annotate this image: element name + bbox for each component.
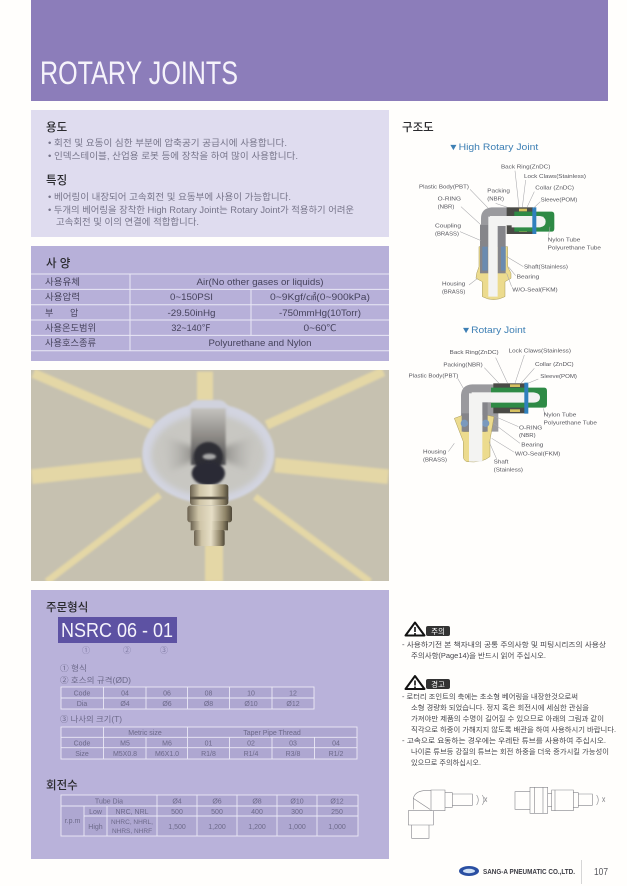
part labels: (Stainless) xyxy=(494,468,523,474)
warning text: - 로터리 조인트의 축에는 초소형 베어링을 내장한것으로써 xyxy=(402,692,578,701)
table: hose size codes: Ø8 xyxy=(204,701,213,708)
specification table: 사용압력 xyxy=(45,291,80,302)
warning text: - 고속으로 요동하는 경우에는 우레탄 튜브를 사용하여 주십시오. xyxy=(402,736,606,745)
heading: rotation speed: 회전수 xyxy=(46,777,78,793)
legend: type and hose size: ① 형식 xyxy=(60,664,87,673)
table: rotation speed by tube diameter: 400 xyxy=(251,809,263,816)
part labels: W/O-Seal(FKM) xyxy=(512,287,558,293)
specification table: 사용호스종류 xyxy=(45,338,96,348)
part labels xyxy=(409,349,597,474)
heading: specifications: 사 양 xyxy=(46,255,71,271)
table: hose size codes: Code xyxy=(74,690,90,698)
specification table: 0~150PSI xyxy=(170,292,213,302)
part labels: Sleeve(POM) xyxy=(541,197,577,203)
table: hose size codes: 10 xyxy=(247,690,255,698)
text block: usage: • 인덱스테이블, 산업용 로봇 등에 장착을 하여 많이 사용합니다. xyxy=(48,150,298,161)
part labels: Collar (ZnDC) xyxy=(535,362,574,368)
part labels: Housing xyxy=(442,282,465,288)
warning text: 직각으로 하중이 가해지지 않도록 배관을 하여 사용하시기 바랍니다. xyxy=(411,725,616,734)
part labels: Bearing xyxy=(517,275,539,281)
table: hose size codes xyxy=(61,687,314,709)
joint cross-section xyxy=(476,207,554,300)
table: rotation speed by tube diameter: 1,200 xyxy=(208,824,226,831)
warning text: 있으므로 주의하십시오. xyxy=(411,758,481,767)
table: hose size codes: Ø12 xyxy=(286,701,300,708)
table: rotation speed by tube diameter: High xyxy=(88,824,103,831)
part labels: Shaft xyxy=(494,460,509,466)
specification table: -29.50inHg xyxy=(168,308,216,318)
table: rotation speed by tube diameter: NRC, NRL xyxy=(115,809,149,816)
table: thread codes: Metric size xyxy=(128,730,162,737)
table: thread codes: Code xyxy=(74,740,90,748)
table: rotation speed by tube diameter: NHRC, NHRL, xyxy=(111,819,153,826)
part labels: Polyurethane Tube xyxy=(548,245,601,251)
specification table: 32~140℉ xyxy=(171,323,211,333)
panel: ordering code and rotation speed xyxy=(31,590,389,859)
table: thread codes: 01 xyxy=(205,740,212,748)
table: rotation speed by tube diameter: Low xyxy=(89,809,103,816)
table: thread codes: 02 xyxy=(247,740,255,748)
table: rotation speed by tube diameter: NHRS, NHRF xyxy=(112,828,152,835)
table: thread codes: R3/8 xyxy=(286,751,300,758)
table: rotation speed by tube diameter: Tube Dia xyxy=(95,798,123,806)
part labels: (BRASS) xyxy=(442,290,465,296)
table: rotation speed by tube diameter: Ø8 xyxy=(252,798,262,806)
specification table: -750mmHg(10Torr) xyxy=(279,308,361,318)
part labels: Packing xyxy=(487,189,510,195)
code position markers xyxy=(82,646,168,655)
text block: features xyxy=(48,191,354,227)
part labels: Bearing xyxy=(521,443,543,449)
diagram: high rotary joint xyxy=(419,142,601,300)
specification table: 사용유체 xyxy=(45,277,80,287)
table: hose size codes: 06 xyxy=(163,690,171,698)
caution note xyxy=(402,622,607,660)
part labels: Plastic Body(PBT) xyxy=(409,373,458,379)
warning label xyxy=(426,679,450,689)
icon: company logo xyxy=(459,866,479,876)
panel: usage and features xyxy=(31,110,389,237)
caution text: - 사용하기전 본 책자내의 공통 주의사항 및 피팅시리즈의 사용상 xyxy=(402,640,607,649)
table: thread codes: 04 xyxy=(332,740,340,748)
table: thread codes: R1/4 xyxy=(244,751,258,758)
part labels: Coupling xyxy=(435,224,461,230)
caution label: 주의 xyxy=(431,626,445,636)
leader lines xyxy=(448,355,545,459)
table: rotation speed by tube diameter: Ø6 xyxy=(212,798,222,806)
part labels: Polyurethane Tube xyxy=(544,420,597,426)
table: hose size codes: 04 xyxy=(121,690,129,698)
photo: spinning rotary joint with radiating tubes xyxy=(31,370,389,582)
warning text: 나이론 튜브등 강질의 튜브는 회전 하중을 더욱 증가시킬 가능성이 xyxy=(411,747,609,756)
table: rotation speed by tube diameter: r.p.m xyxy=(65,818,80,825)
table: rotation speed by tube diameter: 500 xyxy=(171,809,183,816)
part labels: Lock Claws(Stainless) xyxy=(524,174,586,180)
part labels: W/O-Seal(FKM) xyxy=(515,451,560,457)
panel: specifications xyxy=(31,246,389,361)
table: thread codes: R1/8 xyxy=(201,751,216,758)
icon: caution triangle xyxy=(406,622,424,636)
table: rotation speed by tube diameter xyxy=(61,795,358,836)
warning label: 경고 xyxy=(431,679,445,689)
table: rotation speed by tube diameter: 1,000 xyxy=(288,824,306,831)
table: rotation speed by tube diameter: 1,000 xyxy=(328,824,346,831)
table: thread codes: R1/2 xyxy=(329,751,343,758)
code position markers: ② xyxy=(123,646,131,655)
heading: structure diagram: 구조도 xyxy=(402,119,434,135)
table: rotation speed by tube diameter: Ø12 xyxy=(330,798,344,806)
caution label xyxy=(426,626,450,636)
specification table: Air(No other gases or liquids) xyxy=(196,277,324,287)
part labels: Packing(NBR) xyxy=(443,362,483,368)
part labels: (NBR) xyxy=(519,433,536,439)
specification table: 부 xyxy=(45,308,53,318)
heading: order format: 주문형식 xyxy=(46,599,88,615)
table: thread codes: Size xyxy=(75,751,89,758)
specification table: Polyurethane and Nylon xyxy=(208,338,312,348)
specification table: 사용온도범위 xyxy=(45,323,96,333)
table: rotation speed by tube diameter: 300 xyxy=(291,809,303,816)
warning note xyxy=(402,676,616,767)
joint cross-section xyxy=(454,383,547,462)
table: rotation speed by tube diameter: Ø10 xyxy=(290,798,304,806)
part labels: Back Ring(ZnDC) xyxy=(450,350,499,356)
table: hose size codes: Ø10 xyxy=(244,701,258,708)
table: hose size codes: Ø6 xyxy=(162,701,172,708)
part labels: (BRASS) xyxy=(435,231,459,237)
legend: type and hose size xyxy=(60,664,131,685)
table: hose size codes: Dia xyxy=(77,701,87,708)
part labels: (NBR) xyxy=(487,197,504,203)
table: hose size codes: 12 xyxy=(289,690,297,698)
text block: usage: • 회전 및 요동이 심한 부분에 압축공기 공급시에 사용합니다. xyxy=(48,137,287,148)
part labels: Back Ring(ZnDC) xyxy=(501,164,550,170)
part labels: O-RING xyxy=(438,196,461,202)
legend: type and hose size: ② 호스의 규격(ØD) xyxy=(60,675,131,685)
warning text: 가져야만 제품의 수명이 길어질 수 있으므로 아래의 그림과 같이 xyxy=(411,714,604,723)
part labels: Nylon Tube xyxy=(544,412,576,418)
icon: warning triangle xyxy=(406,676,424,689)
table: rotation speed by tube diameter: 1,500 xyxy=(168,824,186,831)
part labels: (BRASS) xyxy=(423,457,447,463)
part labels: Sleeve(POM) xyxy=(540,374,577,380)
table: rotation speed by tube diameter: Ø4 xyxy=(172,798,182,806)
table: hose size codes: 08 xyxy=(205,690,212,698)
warning text xyxy=(402,692,616,767)
specification table: 압 xyxy=(70,307,78,318)
company logo and name: SANG-A PNEUMATIC CO.,LTD. xyxy=(483,869,575,876)
table: thread codes: M5X0.8 xyxy=(113,751,137,758)
text block: features: • 두개의 베어링을 장착한 High Rotary Joint는 Rotary Joint가 적용하기 어려운 xyxy=(48,204,354,215)
part labels: Housing xyxy=(423,450,446,456)
heading: features: 특징 xyxy=(46,172,67,188)
code position markers: ① xyxy=(82,646,90,655)
specification table: 0~60℃ xyxy=(304,323,336,333)
table: hose size codes: Ø4 xyxy=(120,701,130,708)
subtitle: ▼High Rotary Joint xyxy=(448,142,539,152)
table: rotation speed by tube diameter: 500 xyxy=(211,809,223,816)
code position markers: ③ xyxy=(160,646,168,655)
table: thread codes: M6X1.0 xyxy=(155,751,179,758)
table: rotation speed by tube diameter: 1,200 xyxy=(248,824,266,831)
part labels: (NBR) xyxy=(438,204,454,210)
caution text: 주의사항(Page14)을 반드시 읽어 주십시오. xyxy=(411,651,546,660)
caution text xyxy=(402,640,607,660)
legend: thread size: ③ 나사의 크기(T) xyxy=(60,714,122,724)
divider xyxy=(581,860,582,884)
table: thread codes: Taper Pipe Thread xyxy=(243,730,301,737)
table: thread codes xyxy=(61,727,357,759)
warning text: 소형 경량화 되었습니다. 정지 혹은 회전시에 세심한 관심을 xyxy=(411,703,590,712)
drawing: straight fitting with side load xyxy=(515,787,605,813)
subtitle: ▼Rotary Joint xyxy=(461,325,526,335)
table: thread codes: 03 xyxy=(289,740,297,748)
order code badge: NSRC 06 - 01 xyxy=(61,619,173,642)
text block: features: 고속회전 및 이의 연결에 적합합니다. xyxy=(56,216,199,227)
table: thread codes: M5 xyxy=(120,740,130,748)
part labels: O-RING xyxy=(519,425,542,431)
drawing: elbow fitting with side load xyxy=(408,790,487,838)
part labels: Plastic Body(PBT) xyxy=(419,184,469,190)
heading: usage: 용도 xyxy=(46,119,68,135)
specification table xyxy=(31,274,389,351)
specification table: 0~9Kgf/㎠(0~900kPa) xyxy=(270,292,370,302)
page number: 107 xyxy=(594,866,608,878)
text block: usage xyxy=(48,137,298,161)
leader lines xyxy=(460,171,550,287)
title: ROTARY JOINTS xyxy=(40,55,238,91)
text block: features: • 베어링이 내장되어 고속회전 및 요동부에 사용이 가능합니다. xyxy=(48,191,291,202)
company logo and name xyxy=(459,866,575,876)
part labels xyxy=(419,164,601,296)
brass fitting xyxy=(187,484,232,546)
table: rotation speed by tube diameter: 250 xyxy=(331,809,343,816)
header banner xyxy=(31,0,608,101)
part labels: Nylon Tube xyxy=(548,237,580,243)
diagram: rotary joint xyxy=(409,325,597,474)
part labels: Lock Claws(Stainless) xyxy=(509,349,571,355)
part labels: Collar (ZnDC) xyxy=(535,186,574,192)
part labels: Shaft(Stainless) xyxy=(524,265,568,271)
table: thread codes: M6 xyxy=(162,740,172,748)
